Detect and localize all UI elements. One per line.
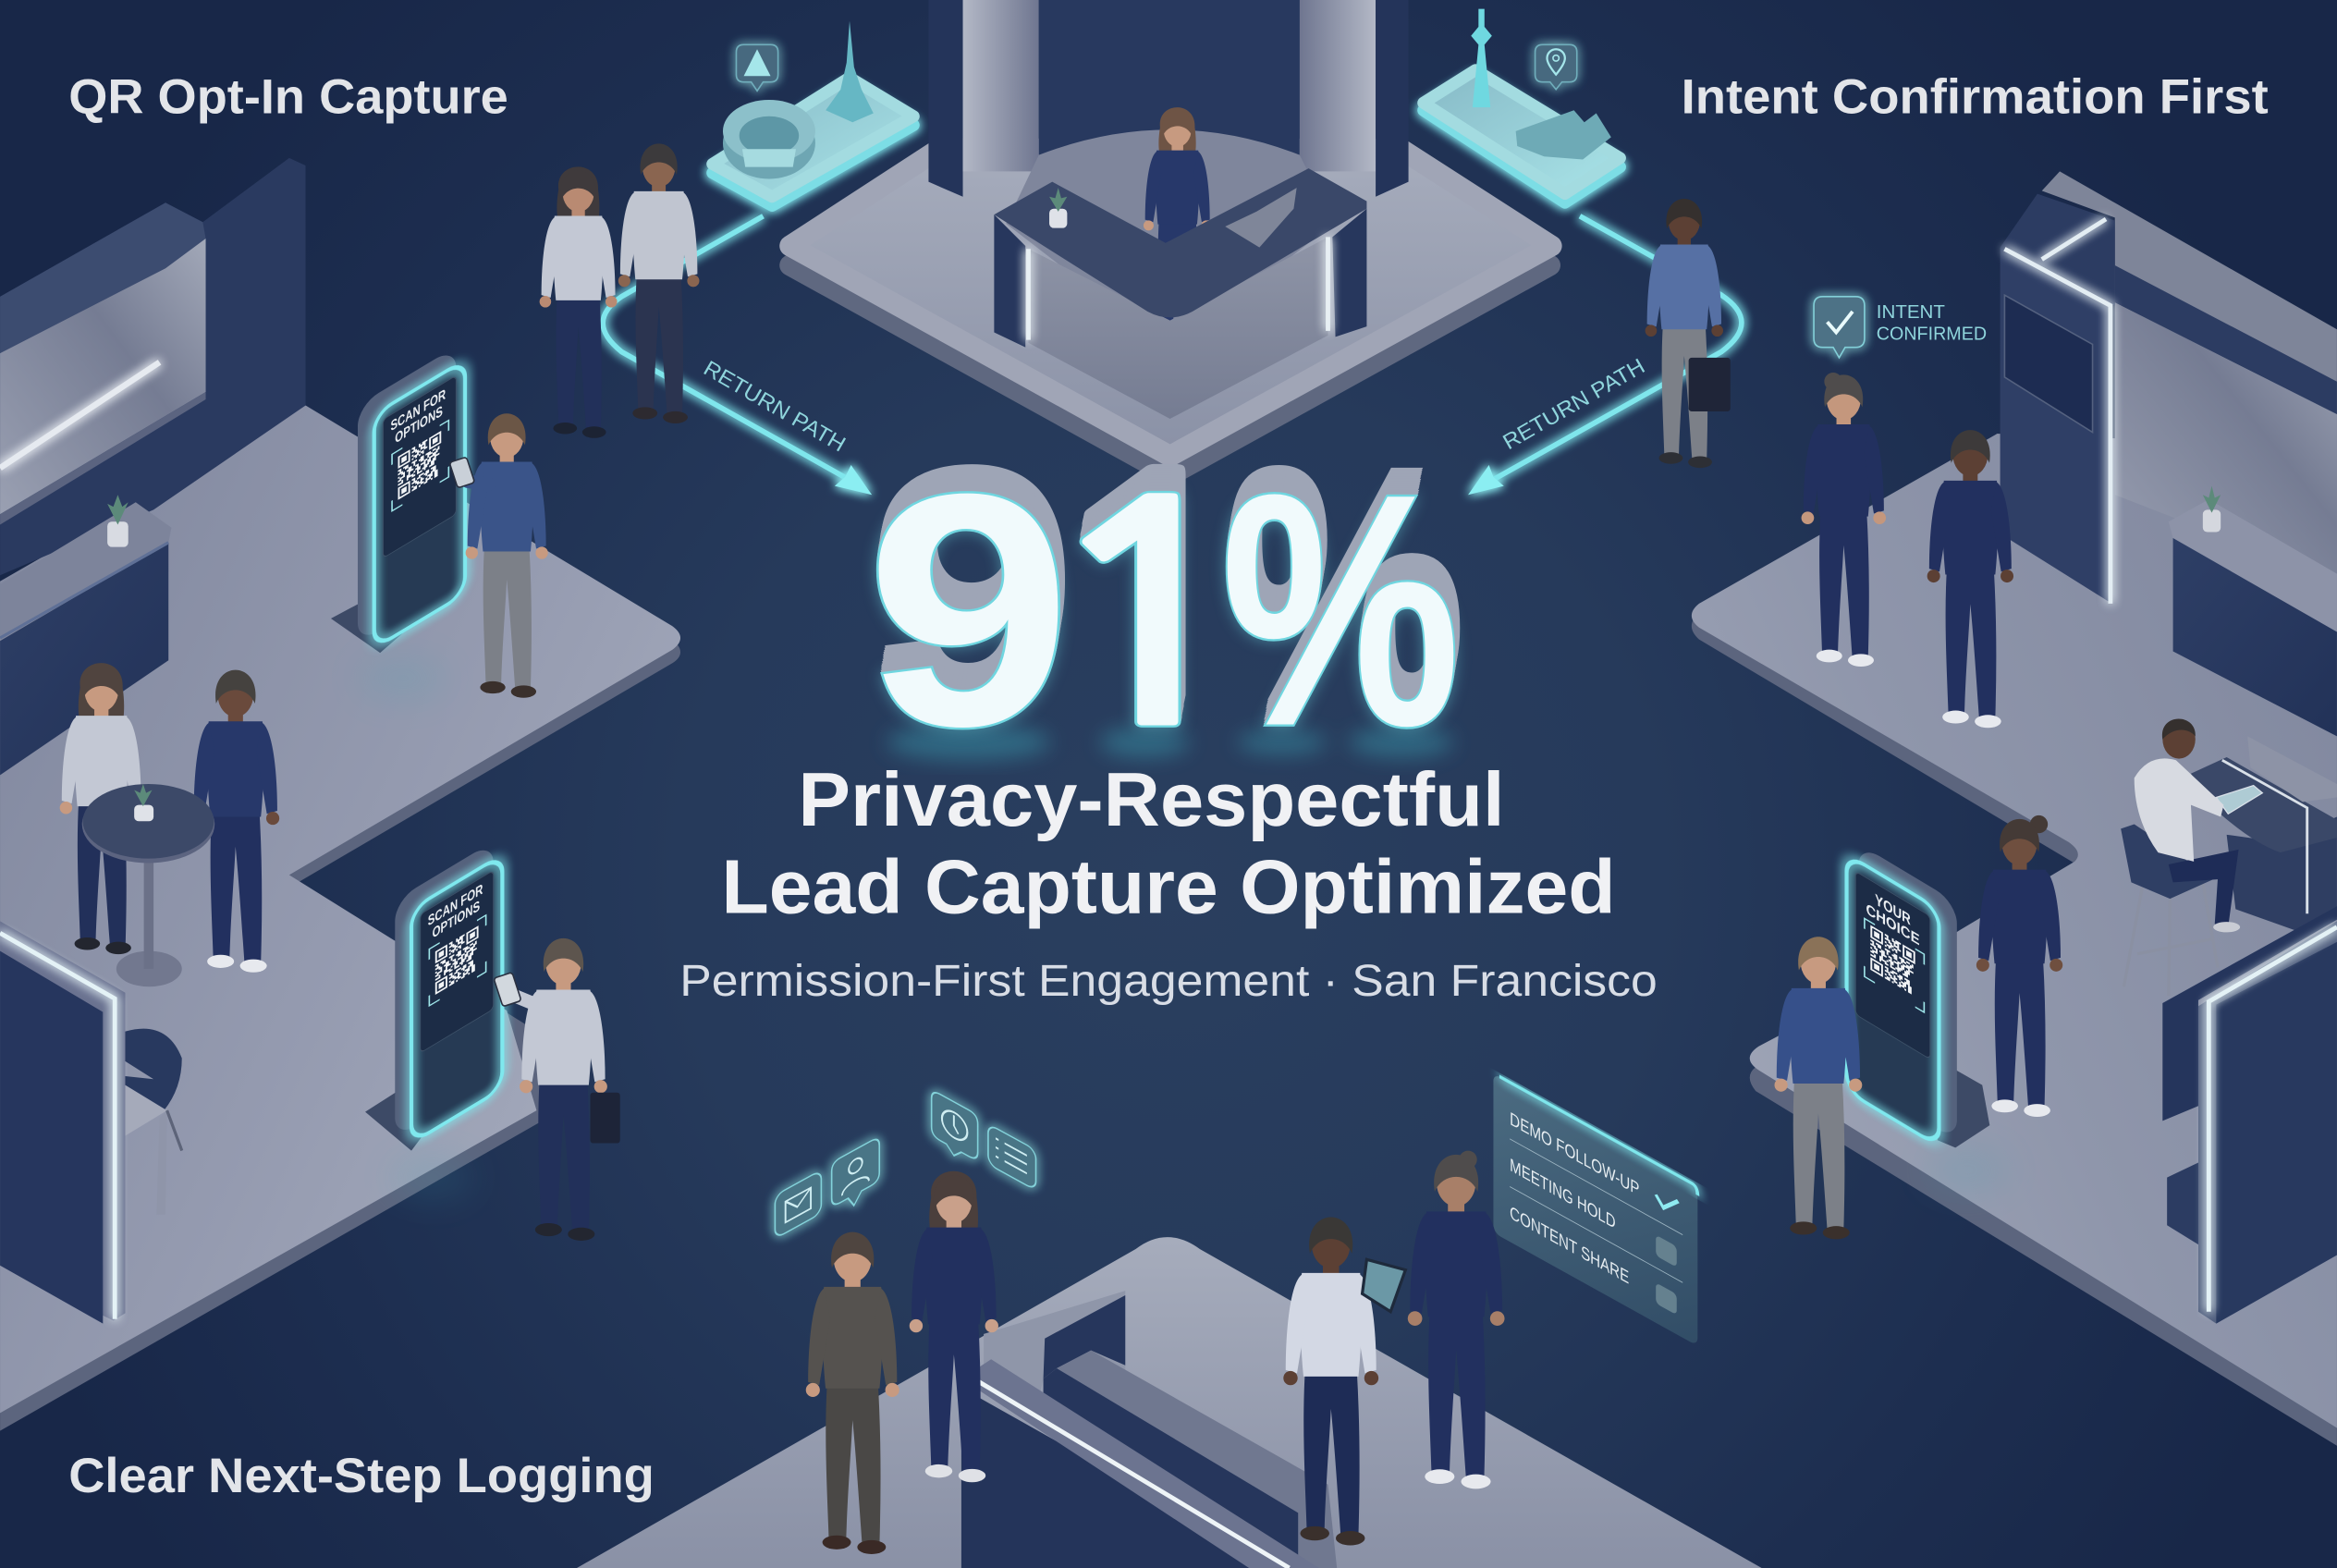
icon: clock chat bubble (932, 1089, 978, 1169)
big stat: 91%: 1 (1033, 469, 1266, 771)
label: intent confirmed: CONFIRMED (1877, 324, 1987, 345)
icon: desk plant (1049, 188, 1067, 228)
icon: tower (826, 21, 874, 122)
phone (449, 457, 475, 488)
holographic city base right with landmarks (1424, 9, 1620, 202)
person: staff at table (191, 666, 279, 973)
kiosk: scan for options upper (331, 347, 465, 653)
receptionist (1144, 107, 1211, 345)
person: staff woman by kiosk (1976, 815, 2062, 1117)
laptop (1225, 188, 1297, 248)
checklist item: CONTENT SHARE (1510, 1203, 1629, 1289)
path glow reflections (358, 657, 2009, 1198)
title: Privacy-Respectful (798, 758, 1505, 842)
left lower partition wall (0, 921, 125, 1324)
stat reflection glow (887, 725, 1453, 760)
platform: top center reception floor (790, 149, 1551, 475)
title (721, 758, 1616, 929)
kiosk: your choice: CHOICE (1866, 900, 1920, 949)
person: seated man on stool (2121, 718, 2240, 996)
reception desk (994, 168, 1366, 419)
icon: list chat bubble (988, 1124, 1036, 1190)
phone (494, 973, 521, 1007)
QR code (398, 432, 440, 499)
icon: building (1516, 110, 1611, 160)
left wall with lit window (0, 158, 306, 575)
kiosk: scan for options lower (365, 841, 502, 1151)
bottom center counter walls (961, 1291, 1337, 1568)
briefcase (590, 1093, 620, 1144)
briefcase (1689, 358, 1731, 411)
icon: intent confirmed (1814, 297, 1865, 358)
arrow: left return path (603, 216, 872, 495)
check mark (1656, 1189, 1678, 1216)
person: staff woman talking (910, 1171, 998, 1482)
platform: right floor (1692, 434, 2337, 1446)
person: woman walking (540, 166, 618, 438)
checklist item: MEETING HOLD (1510, 1155, 1616, 1233)
kiosk: scan for options lower: OPTIONS (433, 897, 480, 942)
person: man walking (618, 140, 699, 423)
checklist item: DEMO FOLLOW-UP (1510, 1109, 1639, 1200)
person: man at your choice kiosk (1775, 933, 1862, 1239)
bistro table (82, 784, 214, 986)
icon: observation tower (1471, 9, 1492, 107)
chair and side table (125, 1029, 182, 1215)
platform: bottom center floor (577, 1237, 1762, 1568)
kiosk text: SCAN FOR (390, 386, 446, 435)
kiosk: your choice (1847, 843, 1989, 1147)
left counter with plant (0, 495, 171, 775)
heading: Intent Confirmation First: Intent Confirmation First (1682, 70, 2269, 125)
heading: Clear Next-Step Logging: Clear Next-Step Logging (68, 1449, 655, 1503)
person: man facing staff (1927, 426, 2013, 728)
heading: QR Opt-In Capture: QR Opt-In Capture (68, 70, 508, 125)
right counter with plant (2169, 486, 2337, 736)
raised arm (514, 996, 540, 1006)
subtitle: Permission-First Engagement · San Francisco (679, 956, 1658, 1006)
person: man with briefcase at lower kiosk (494, 934, 620, 1241)
demo follow-up checklist panel (1493, 1073, 1697, 1346)
person: man in grey suit (806, 1228, 899, 1554)
seated desk station (2191, 736, 2337, 935)
reception pillars and back wall (928, 0, 1409, 350)
kiosk: scan for options upper: OPTIONS (395, 402, 443, 447)
kiosk text: SCAN FOR (428, 880, 483, 929)
platform: left floor (0, 406, 680, 1431)
person: woman at table (60, 663, 143, 954)
kiosk text: YOUR (1875, 890, 1911, 929)
person: man with tablet (1283, 1213, 1405, 1545)
holographic city base left with landmarks (713, 21, 913, 205)
person: man with blue sweater and briefcase (1646, 195, 1731, 468)
icon: arena (723, 100, 815, 178)
person: man scanning kiosk (449, 410, 548, 698)
label: left return path: RETURN PATH (700, 356, 850, 457)
big stat: 91%: % (1220, 425, 1461, 795)
label: intent confirmed: INTENT (1877, 301, 1945, 323)
icon: mail chat bubble (775, 1170, 821, 1239)
person: staff woman right (1802, 371, 1886, 667)
big stat: 91%: 9 (866, 425, 1071, 795)
QR code (435, 927, 478, 994)
icon: person chat bubble (832, 1136, 879, 1218)
icon: pyramid map pin (736, 44, 778, 91)
label: right return path: RETURN PATH (1499, 353, 1648, 454)
QR code (1870, 925, 1915, 995)
right wall with panels (2001, 171, 2337, 604)
person: staff woman with bun (1408, 1150, 1505, 1488)
arrow: right return path (1468, 216, 1742, 495)
raised arm (468, 482, 489, 484)
icon: location pin (1536, 44, 1577, 90)
title: Lead Capture Optimized (721, 845, 1616, 929)
lower right wall panels (2162, 906, 2337, 1324)
tablet (1363, 1259, 1405, 1312)
